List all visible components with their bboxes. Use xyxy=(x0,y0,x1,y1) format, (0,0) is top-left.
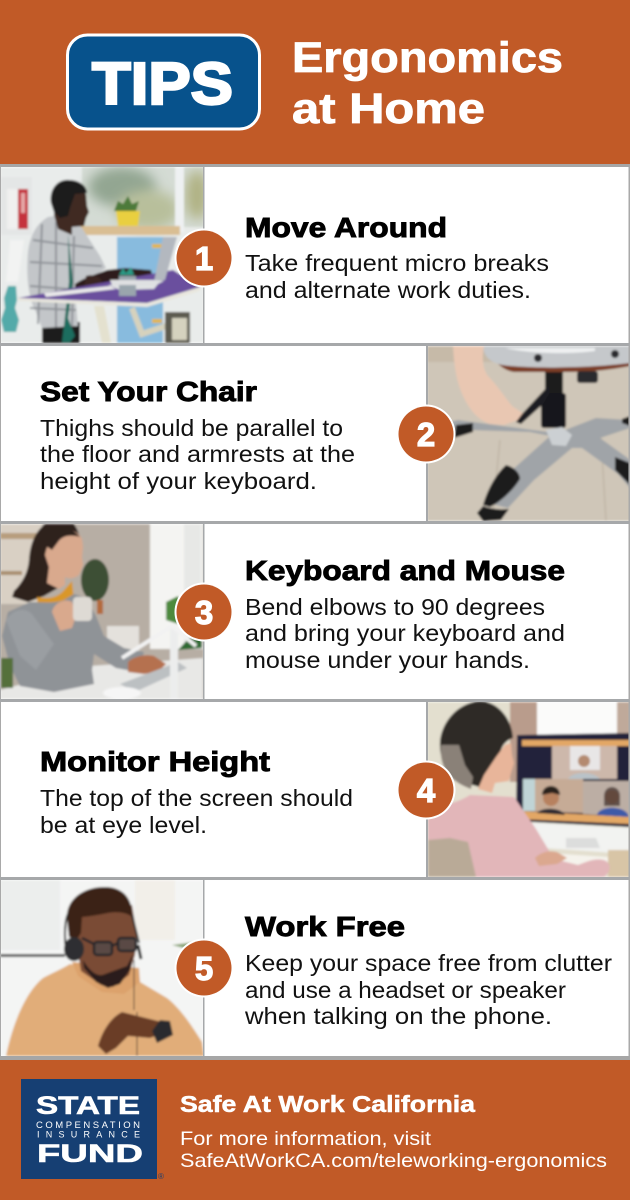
step 1 xyxy=(174,212,549,303)
body xyxy=(244,950,612,1029)
photo: woman at keyboard with cup xyxy=(0,524,204,699)
step 3 xyxy=(174,555,565,673)
body xyxy=(245,250,549,303)
badge 3: 3 xyxy=(195,594,213,631)
footer heading: Safe At Work California xyxy=(180,1091,475,1117)
heading: Set Your Chair xyxy=(40,376,257,407)
step 5 xyxy=(174,911,612,1029)
title xyxy=(292,35,563,133)
step 2 xyxy=(40,376,456,494)
badge 1 xyxy=(174,228,234,288)
body: and use a headset or speaker xyxy=(245,977,566,1003)
heading: Keyboard and Mouse xyxy=(245,555,565,586)
photo: man at standing desk xyxy=(0,167,209,343)
badge 2: 2 xyxy=(417,416,435,453)
footer text: SafeAtWorkCA.com/teleworking-ergonomics xyxy=(180,1150,607,1172)
badge 2 xyxy=(396,404,456,464)
heading: Monitor Height xyxy=(40,746,270,777)
row dividers and frame xyxy=(0,167,630,1060)
body: Take frequent micro breaks xyxy=(245,250,549,276)
body: mouse under your hands. xyxy=(245,647,530,673)
body: the floor and armrests at the xyxy=(40,441,355,467)
body: Keep your space free from clutter xyxy=(245,950,612,976)
photo: video call on monitor xyxy=(427,701,630,877)
footer text xyxy=(180,1128,607,1172)
logo: State Compensation Insurance Fund: INSURANCE xyxy=(37,1130,140,1140)
body: Bend elbows to 90 degrees xyxy=(245,594,545,620)
body: and alternate work duties. xyxy=(245,277,531,303)
badge 5: 5 xyxy=(195,950,213,987)
header banner xyxy=(0,0,630,167)
heading: Move Around xyxy=(245,212,447,243)
photo: adjusting office chair xyxy=(427,346,630,521)
badge 1: 1 xyxy=(195,240,213,277)
body: be at eye level. xyxy=(40,812,207,838)
body xyxy=(40,785,353,838)
TIPS badge xyxy=(68,35,260,129)
body: Thighs should be parallel to xyxy=(40,415,343,441)
body xyxy=(245,594,565,673)
heading: Work Free xyxy=(245,911,405,942)
title: at Home xyxy=(292,86,485,133)
logo: State Compensation Insurance Fund xyxy=(21,1079,164,1181)
TIPS badge: TIPS xyxy=(92,51,233,117)
logo: State Compensation Insurance Fund: FUND xyxy=(37,1140,143,1168)
footer xyxy=(0,1060,630,1200)
photo: man with headset xyxy=(0,880,204,1056)
badge 5 xyxy=(174,938,234,998)
logo: State Compensation Insurance Fund: COMPENSATION xyxy=(36,1120,140,1131)
step 4 xyxy=(40,746,456,838)
badge 3 xyxy=(174,582,234,642)
title: Ergonomics xyxy=(292,35,563,82)
body: The top of the screen should xyxy=(40,785,353,811)
badge 4: 4 xyxy=(417,772,436,809)
logo: State Compensation Insurance Fund: STATE xyxy=(36,1092,140,1120)
body xyxy=(40,415,355,494)
badge 4 xyxy=(396,760,456,820)
body: height of your keyboard. xyxy=(40,468,317,494)
body: and bring your keyboard and xyxy=(245,620,565,646)
footer text: For more information, visit xyxy=(180,1128,432,1150)
logo: State Compensation Insurance Fund: ® xyxy=(158,1172,164,1181)
body: when talking on the phone. xyxy=(244,1003,552,1029)
